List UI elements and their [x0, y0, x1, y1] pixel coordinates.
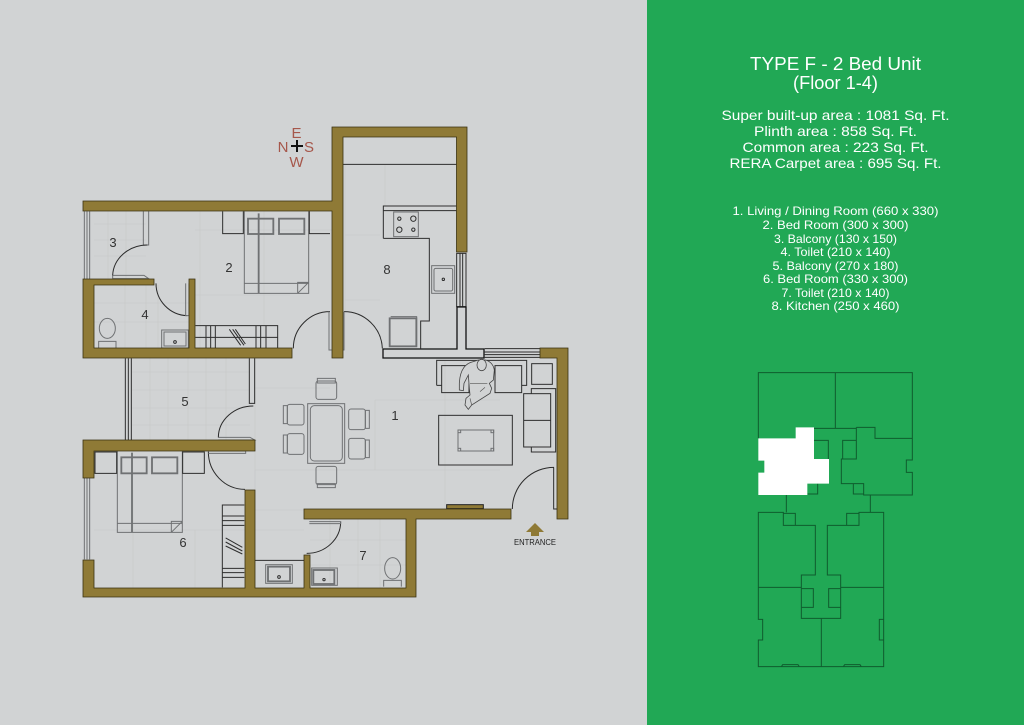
- compass: [278, 125, 314, 171]
- room numbers: 4: [141, 307, 149, 322]
- area summary: RERA Carpet area : 695 Sq. Ft.: [730, 155, 942, 171]
- dining table: [308, 404, 345, 463]
- floor plan: [83, 127, 568, 597]
- room list: 1. Living / Dining Room (660 x 330): [732, 204, 938, 218]
- walls: [83, 127, 568, 597]
- panel: green info panel: [647, 0, 1024, 725]
- sofas and coffee table: [437, 360, 556, 465]
- title: TYPE F - 2 Bed Unit: [750, 54, 921, 74]
- balcony 5, bedroom 6: [84, 358, 304, 587]
- title: [750, 54, 921, 93]
- kitchen furniture: [329, 164, 540, 357]
- entrance marker: ENTRANCE: [514, 538, 556, 547]
- room numbers: 6: [179, 535, 187, 550]
- room list: 8. Kitchen (250 x 460): [772, 299, 900, 313]
- room numbers: 7: [359, 548, 367, 563]
- area summary: Plinth area : 858 Sq. Ft.: [754, 123, 917, 139]
- area summary: [722, 107, 950, 171]
- room list: [732, 204, 938, 313]
- title: (Floor 1-4): [793, 73, 878, 93]
- balcony 3 window and doors: [84, 211, 149, 279]
- room numbers: 2: [225, 260, 233, 275]
- entrance marker: [514, 523, 556, 547]
- compass: E: [291, 125, 302, 142]
- key plan: [758, 373, 912, 667]
- room list: 4. Toilet (210 x 140): [780, 245, 890, 259]
- compass: N: [278, 139, 288, 156]
- wardrobe 6: [222, 505, 244, 587]
- seated person: [459, 359, 494, 409]
- wardrobe: [195, 326, 278, 348]
- room list: 7. Toilet (210 x 140): [782, 286, 890, 300]
- toilet 4: [99, 318, 115, 338]
- room numbers: [109, 235, 399, 563]
- window ledge, entrance door and toilet 7: [307, 467, 557, 587]
- dining, living, toilet 7: [283, 360, 556, 488]
- room 2 and 3 furniture: [84, 211, 330, 348]
- bed 6: [117, 451, 182, 532]
- compass: W: [289, 154, 304, 171]
- room numbers: 8: [383, 262, 391, 277]
- area summary: Super built-up area : 1081 Sq. Ft.: [722, 107, 950, 123]
- floor tile grid: [94, 164, 500, 588]
- compass: S: [304, 139, 314, 156]
- bed 2: [244, 211, 309, 293]
- area summary: Common area : 223 Sq. Ft.: [742, 139, 928, 155]
- room numbers: 1: [391, 408, 399, 423]
- room numbers: 3: [109, 235, 117, 250]
- basin: [255, 559, 304, 562]
- room list: 5. Balcony (270 x 180): [772, 259, 898, 273]
- room numbers: 5: [181, 394, 189, 409]
- room list: 3. Balcony (130 x 150): [774, 232, 897, 246]
- highlighted unit: [758, 427, 829, 495]
- room list: 6. Bed Room (330 x 300): [763, 272, 908, 286]
- room list: 2. Bed Room (300 x 300): [762, 218, 908, 232]
- door 2 arc: [293, 312, 330, 348]
